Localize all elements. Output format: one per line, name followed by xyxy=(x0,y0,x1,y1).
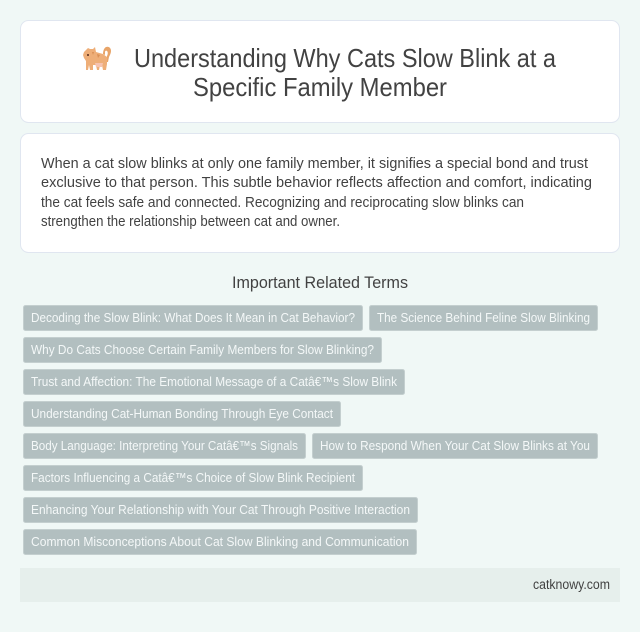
paragraph line 4: strengthen the relationship between cat and owner. xyxy=(41,213,340,230)
tag: body language xyxy=(24,434,306,458)
footer bar xyxy=(20,568,620,602)
tag: trust and affection: Trust and Affection: The Emotional Message of a Catâ€™s Slow Blink xyxy=(31,374,397,389)
tag: cat-human bonding: Understanding Cat-Human Bonding Through Eye Contact xyxy=(31,406,333,421)
icon: orange cat xyxy=(83,47,111,70)
tag: enhancing your relationship: Enhancing Your Relationship with Your Cat Through Positive Interaction xyxy=(31,502,410,517)
tag: common misconceptions: Common Misconceptions About Cat Slow Blinking and Communication xyxy=(31,534,409,549)
tag: trust and affection xyxy=(24,370,404,394)
panel: summary paragraph xyxy=(20,134,620,252)
tag: science behind slow blinking xyxy=(370,306,598,330)
tag: cat-human bonding xyxy=(24,402,340,426)
tag: factors influencing recipient xyxy=(24,466,362,490)
tag: enhancing your relationship xyxy=(24,498,418,522)
paragraph line 3: the cat feels safe and connected. Recognizing and reciprocating slow blinks can xyxy=(41,194,524,211)
paragraph line 2: exclusive to that person. This subtle behavior reflects affection and comfort, indicating xyxy=(41,174,592,191)
paragraph line 1: When a cat slow blinks at only one family member, it signifies a special bond and trust xyxy=(41,155,589,172)
tag: why cats choose certain family members xyxy=(24,338,382,362)
panel: title card xyxy=(20,20,620,122)
tag: how to respond: How to Respond When Your Cat Slow Blinks at You xyxy=(320,438,590,453)
tag: decoding the slow blink: Decoding the Slow Blink: What Does It Mean in Cat Behavior? xyxy=(31,310,355,325)
title line 2: Specific Family Member xyxy=(193,72,447,102)
title line 1: Understanding Why Cats Slow Blink at a xyxy=(134,43,556,73)
tag: decoding the slow blink xyxy=(24,306,362,330)
tag: why cats choose certain family members: Why Do Cats Choose Certain Family Members for Slow Blinking? xyxy=(31,342,374,357)
tag: science behind slow blinking: The Science Behind Feline Slow Blinking xyxy=(377,310,590,325)
heading: related terms: Important Related Terms xyxy=(232,273,408,292)
tag: how to respond xyxy=(312,434,598,458)
footer site name: catknowy.com xyxy=(533,577,610,592)
tag: body language: Body Language: Interpreting Your Catâ€™s Signals xyxy=(31,438,298,453)
tag: common misconceptions xyxy=(24,530,416,554)
tag: factors influencing recipient: Factors Influencing a Catâ€™s Choice of Slow Blink Recipient xyxy=(31,470,355,485)
